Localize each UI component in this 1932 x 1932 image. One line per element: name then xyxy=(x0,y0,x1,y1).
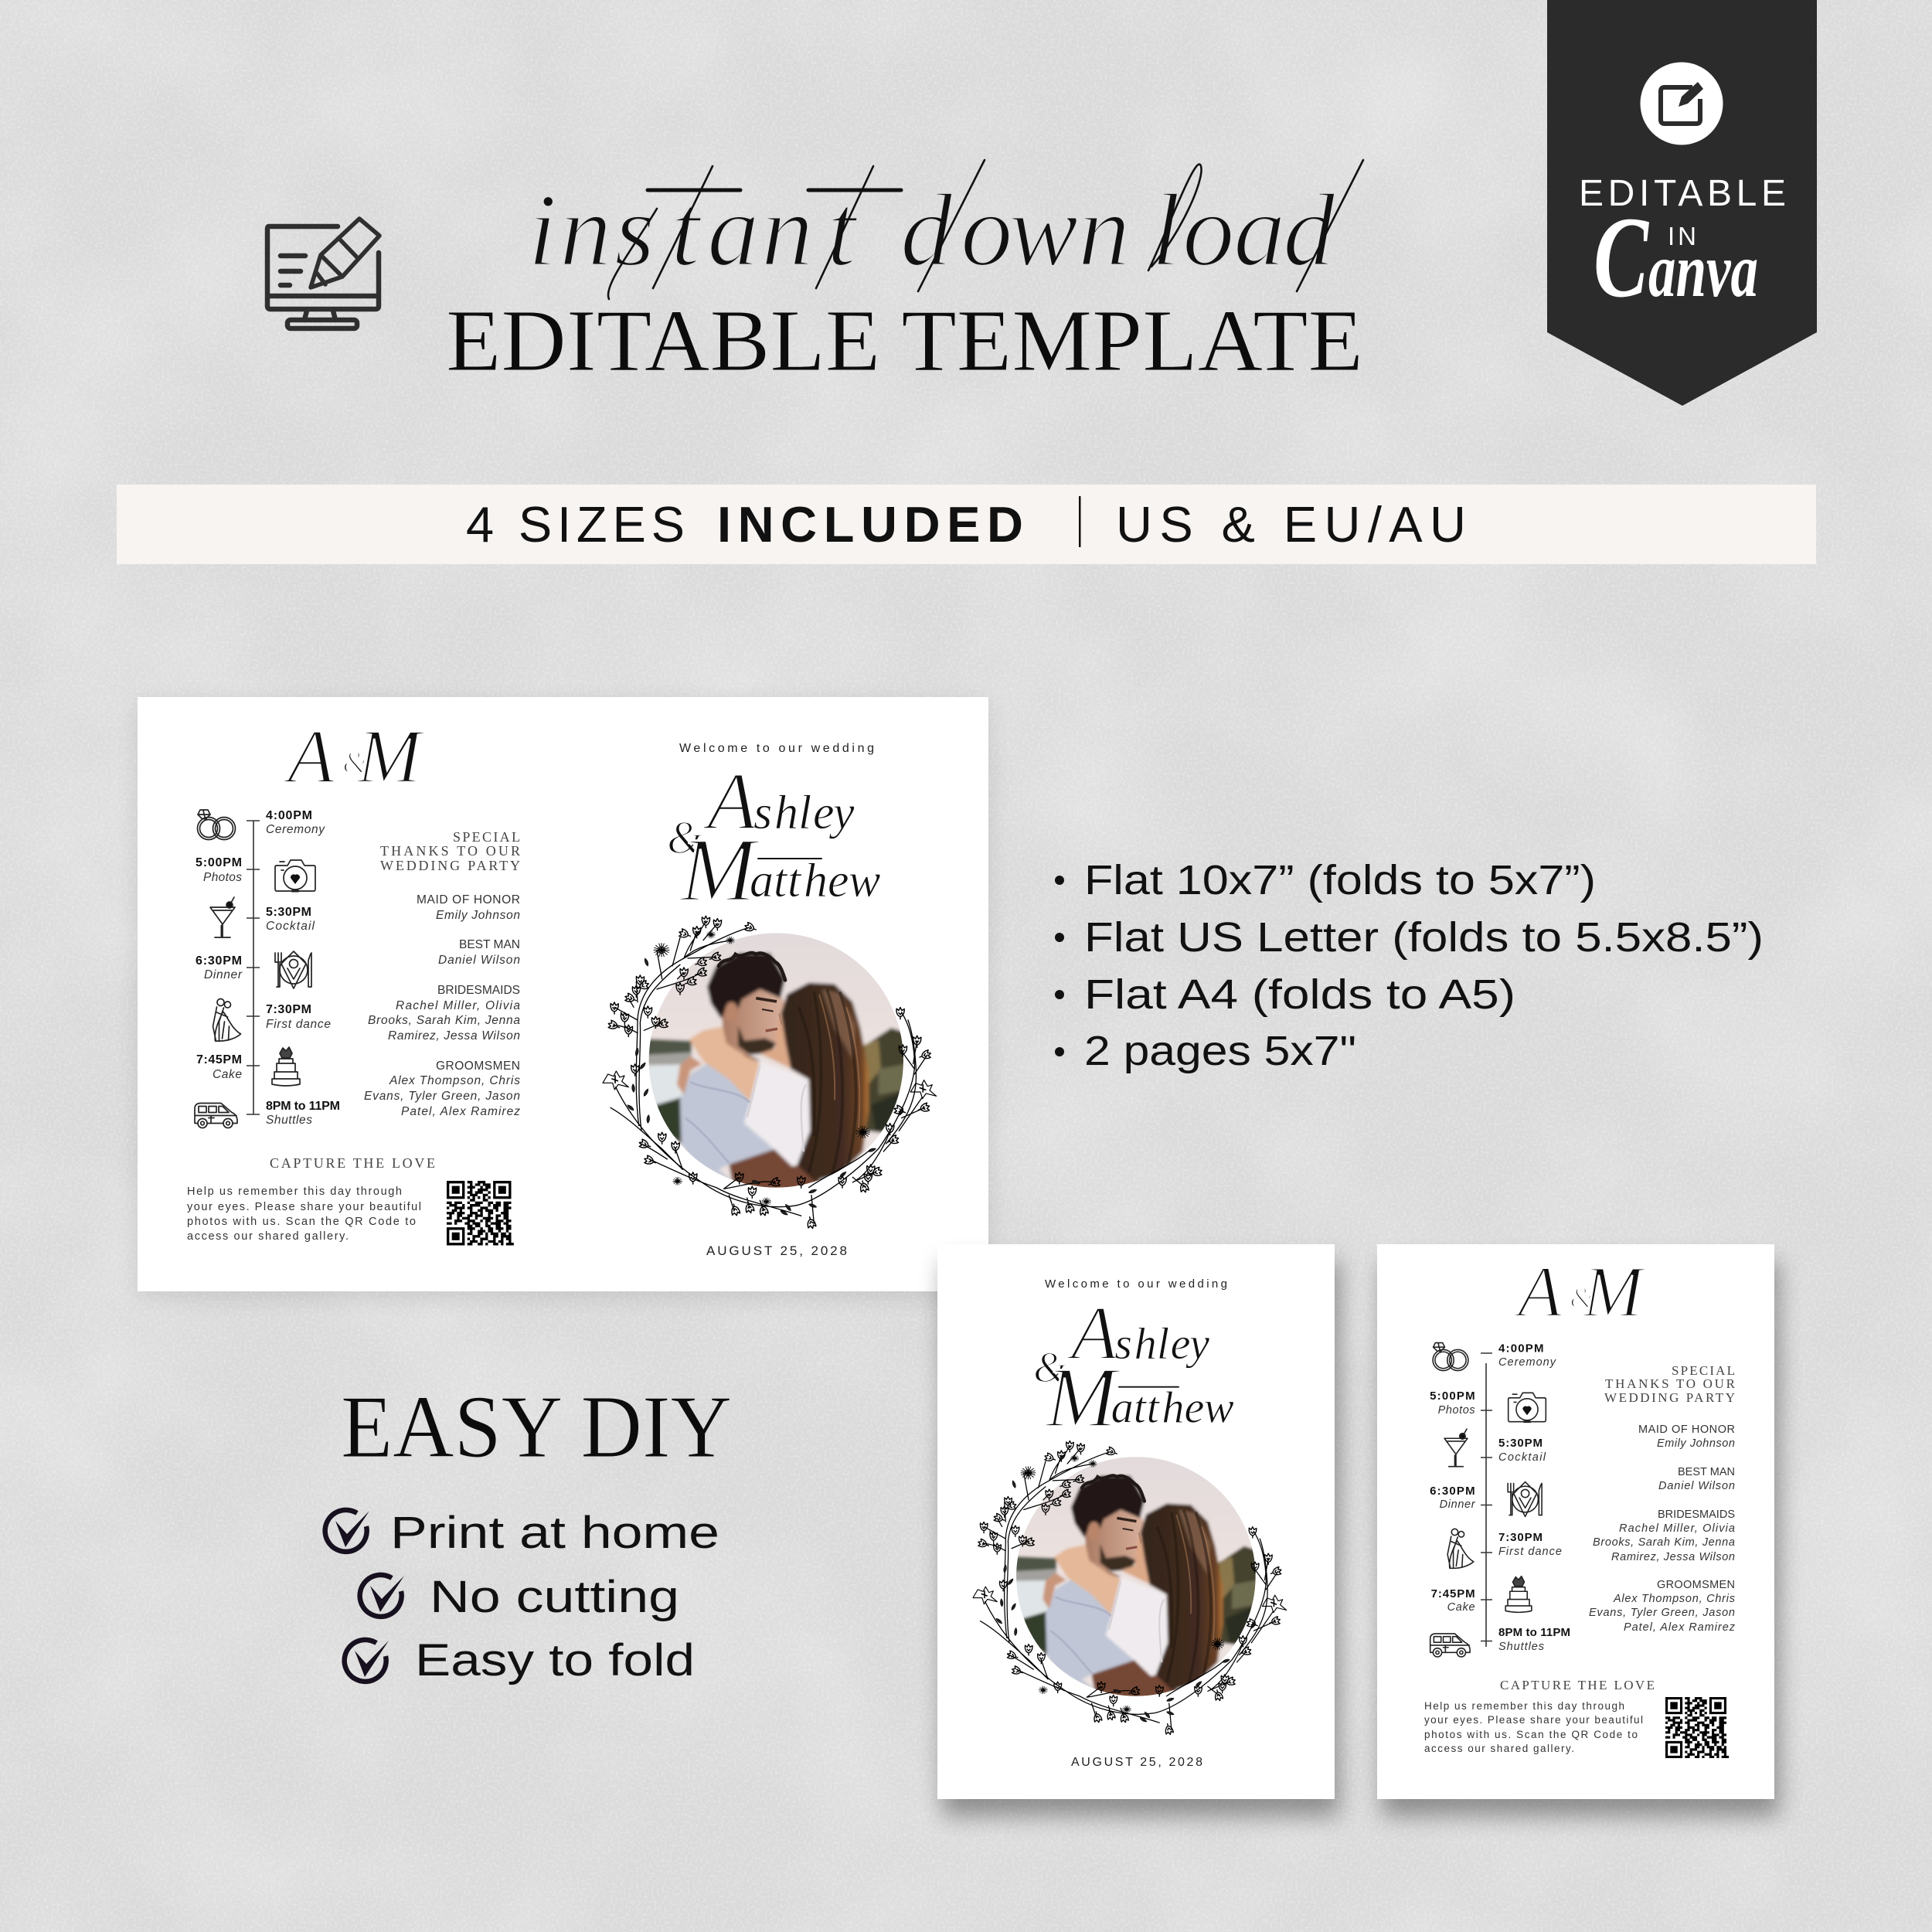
wedding party list: Emily Johnson xyxy=(436,909,520,922)
timeline: 4:00PM xyxy=(1498,1342,1544,1355)
capture the love body: Help us remember this day through xyxy=(187,1185,402,1198)
icon: rings xyxy=(198,810,235,839)
icon: camera xyxy=(275,860,315,891)
wedding party list: MAID OF HONOR xyxy=(417,893,520,906)
couple photo xyxy=(647,930,906,1192)
timeline: 7:30PM xyxy=(1498,1531,1543,1544)
thanks heading: WEDDING PARTY xyxy=(1604,1390,1735,1405)
timeline: Shuttles xyxy=(266,1114,312,1127)
timeline: Dinner xyxy=(1440,1498,1476,1511)
icon: dancing couple xyxy=(1447,1529,1474,1568)
divider bar xyxy=(1079,496,1080,547)
icon: cake xyxy=(272,1047,300,1086)
monogram: A xyxy=(1513,1252,1563,1332)
timeline: 6:30PM xyxy=(1430,1485,1475,1498)
panel: flat brochure xyxy=(138,697,988,1298)
timeline: First dance xyxy=(1498,1546,1562,1558)
couple names script: M xyxy=(679,819,760,920)
timeline xyxy=(1430,1342,1570,1657)
wedding party list: Brooks, Sarah Kim, Jenna xyxy=(1593,1536,1735,1549)
icon: cocktail xyxy=(210,897,235,937)
capture the love body: photos with us. Scan the QR Code to xyxy=(1424,1729,1638,1740)
date: AUGUST 25, 2028 xyxy=(1071,1756,1202,1769)
strip text: included: INCLUDED xyxy=(717,496,1023,553)
thanks heading: SPECIAL xyxy=(1672,1363,1735,1378)
capture the love body: access our shared gallery. xyxy=(1424,1743,1574,1754)
check item: print at home: Print at home xyxy=(390,1508,719,1558)
check item: no cutting: No cutting xyxy=(430,1572,679,1622)
wedding party list: Emily Johnson xyxy=(1657,1437,1735,1450)
wedding party list: BEST MAN xyxy=(459,938,520,951)
wedding party list: Ramirez, Jessa Wilson xyxy=(388,1029,520,1043)
couple names script: atthew xyxy=(1111,1383,1234,1433)
wedding party list: GROOMSMEN xyxy=(436,1060,520,1073)
couple names script xyxy=(1033,1290,1234,1444)
couple photo xyxy=(1014,1454,1259,1701)
monogram: & xyxy=(342,745,368,781)
timeline: First dance xyxy=(266,1018,331,1031)
panel: 5x7 front page xyxy=(937,1244,1339,1816)
icon: cocktail xyxy=(1444,1429,1468,1467)
wedding party list: Ramirez, Jessa Wilson xyxy=(1611,1551,1735,1563)
timeline: 8PM to 11PM xyxy=(1498,1626,1570,1639)
strip text: 4 sizes: 4 SIZES xyxy=(466,496,685,553)
check item: easy to fold xyxy=(345,1635,695,1685)
check item: easy to fold: Easy to fold xyxy=(415,1635,695,1685)
monogram: & xyxy=(1570,1280,1594,1315)
date: AUGUST 25, 2028 xyxy=(706,1243,847,1258)
capture the love body xyxy=(1424,1700,1643,1754)
bullet list: sizes: Flat A4 (folds to A5) xyxy=(1084,971,1515,1018)
timeline: 5:30PM xyxy=(266,906,311,919)
checklist xyxy=(325,1508,719,1685)
QR code xyxy=(1665,1697,1729,1758)
wedding party list: GROOMSMEN xyxy=(1657,1579,1735,1591)
icon: camera xyxy=(1509,1393,1546,1422)
timeline: 4:00PM xyxy=(266,809,312,822)
panel: 5x7 back page xyxy=(1377,1244,1779,1816)
icon: dinner plate xyxy=(275,951,311,988)
couple names script: atthew xyxy=(750,855,880,907)
capture the love body: your eyes. Please share your beautiful xyxy=(187,1201,421,1213)
banner text: Canva script: Canva xyxy=(1594,193,1758,321)
timeline: Photos xyxy=(203,871,242,884)
icon: dinner plate xyxy=(1508,1482,1542,1516)
banner: editable in Canva xyxy=(1547,0,1817,406)
wedding party list: Evans, Tyler Green, Jason xyxy=(1589,1607,1735,1619)
bullet list: sizes: Flat US Letter (folds to 5.5x8.5”) xyxy=(1084,914,1764,961)
floral wreath xyxy=(603,916,937,1230)
timeline: 5:30PM xyxy=(1498,1437,1543,1450)
wedding party list: BEST MAN xyxy=(1678,1466,1735,1478)
wedding party list: BRIDESMAIDS xyxy=(1658,1509,1735,1521)
title: editable template: EDITABLE TEMPLATE xyxy=(446,291,1363,389)
timeline: Dinner xyxy=(204,968,243,981)
timeline: 8PM to 11PM xyxy=(266,1100,340,1113)
couple names script: M xyxy=(1044,1349,1121,1444)
wedding party list: Patel, Alex Ramirez xyxy=(401,1105,520,1118)
icon: cake xyxy=(1505,1577,1532,1612)
timeline: Ceremony xyxy=(1498,1356,1556,1369)
capture the love body: Help us remember this day through xyxy=(1424,1700,1624,1712)
capture the love body: photos with us. Scan the QR Code to xyxy=(187,1216,416,1228)
couple names script: & xyxy=(667,812,703,863)
heading: easy DIY: EASY DIY xyxy=(341,1378,732,1476)
capture the love body xyxy=(187,1185,421,1243)
welcome text: Welcome to our wedding xyxy=(679,742,874,755)
bullet list: sizes xyxy=(1055,857,1764,1074)
icon: computer with pencil xyxy=(267,219,379,328)
strip text: US and EU/AU: US & EU/AU xyxy=(1116,496,1466,553)
timeline: Shuttles xyxy=(1498,1641,1544,1653)
timeline: 5:00PM xyxy=(1430,1389,1475,1403)
capture the love body: your eyes. Please share your beautiful xyxy=(1424,1714,1643,1726)
monogram: M xyxy=(1581,1252,1647,1332)
capture the love heading: CAPTURE THE LOVE xyxy=(1500,1678,1655,1692)
timeline: 7:45PM xyxy=(1431,1587,1475,1600)
capture the love body: access our shared gallery. xyxy=(187,1230,349,1243)
thanks heading: THANKS TO OUR xyxy=(1605,1376,1736,1391)
strip: 4 sizes included xyxy=(117,485,1816,564)
timeline: Cake xyxy=(1447,1601,1475,1614)
icon: shuttle van xyxy=(1430,1634,1470,1657)
wedding party list: Daniel Wilson xyxy=(1658,1480,1735,1492)
banner text: editable: EDITABLE xyxy=(1579,173,1786,214)
monogram: A xyxy=(283,713,335,799)
check item: print at home xyxy=(325,1508,719,1558)
thanks heading xyxy=(1604,1363,1736,1405)
wedding party list: Brooks, Sarah Kim, Jenna xyxy=(368,1014,520,1027)
bullet list: sizes: 2 pages 5x7" xyxy=(1084,1028,1356,1074)
timeline: Cake xyxy=(213,1068,242,1081)
welcome text: Welcome to our wedding xyxy=(1045,1277,1227,1291)
timeline: 5:00PM xyxy=(196,856,242,869)
bullet list: sizes: Flat 10x7” (folds to 5x7”) xyxy=(1084,857,1596,903)
wedding party list: Patel, Alex Ramirez xyxy=(1624,1621,1736,1634)
icon: shuttle van xyxy=(195,1104,237,1128)
couple names script: & xyxy=(1033,1344,1067,1392)
wedding party list xyxy=(1589,1423,1736,1634)
banner text: in: IN xyxy=(1668,222,1696,250)
title: instant download script: instant download xyxy=(528,173,1335,288)
timeline: 7:45PM xyxy=(196,1053,242,1066)
wedding party list: Evans, Tyler Green, Jason xyxy=(364,1090,520,1103)
thanks heading: WEDDING PARTY xyxy=(380,858,520,873)
capture the love heading: CAPTURE THE LOVE xyxy=(270,1155,435,1171)
timeline: 7:30PM xyxy=(266,1003,311,1016)
monogram: M xyxy=(355,713,425,799)
timeline: Cocktail xyxy=(266,920,315,933)
timeline: Ceremony xyxy=(266,823,325,836)
wedding party list: BRIDESMAIDS xyxy=(437,984,520,997)
icon: edit pencil in circle xyxy=(1640,62,1723,145)
thanks heading xyxy=(380,829,520,873)
floral wreath xyxy=(973,1440,1287,1736)
icon: rings xyxy=(1433,1343,1468,1371)
wedding party list: Alex Thompson, Chris xyxy=(1613,1593,1735,1605)
timeline: Photos xyxy=(1438,1404,1475,1417)
wedding party list xyxy=(364,893,520,1118)
check item: no cutting xyxy=(360,1572,679,1622)
thanks heading: SPECIAL xyxy=(453,829,520,845)
wedding party list: MAID OF HONOR xyxy=(1638,1423,1735,1436)
wedding party list: Rachel Miller, Olivia xyxy=(1619,1522,1735,1535)
QR code xyxy=(447,1181,514,1246)
timeline: Cocktail xyxy=(1498,1451,1546,1464)
couple names script xyxy=(667,756,880,920)
icon: dancing couple xyxy=(213,998,241,1041)
timeline: 6:30PM xyxy=(196,954,242,968)
timeline xyxy=(195,809,340,1128)
wedding party list: Rachel Miller, Olivia xyxy=(396,999,520,1012)
wedding party list: Alex Thompson, Chris xyxy=(389,1074,520,1087)
couple names script: Ashley xyxy=(702,756,855,846)
couple names script: Ashley xyxy=(1066,1290,1209,1376)
thanks heading: THANKS TO OUR xyxy=(380,843,520,859)
wedding party list: Daniel Wilson xyxy=(438,954,520,967)
